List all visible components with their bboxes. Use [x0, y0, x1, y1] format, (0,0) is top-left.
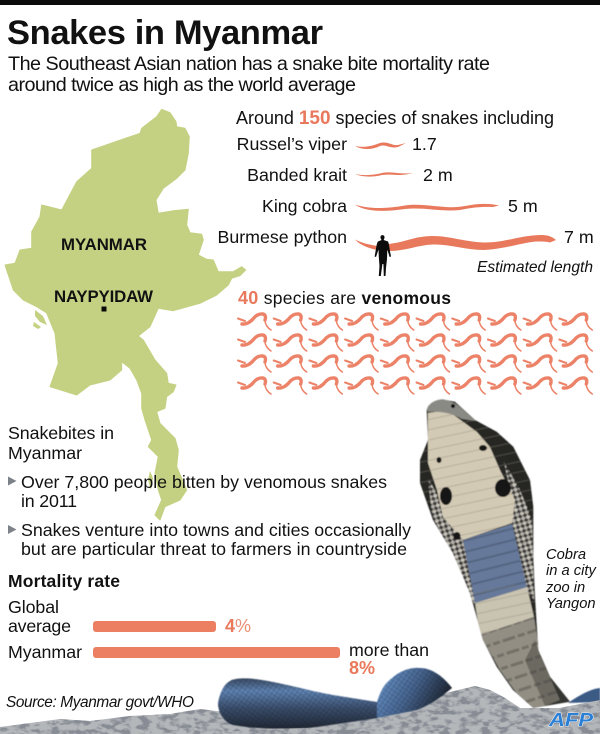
cobra caption: in a city [546, 563, 597, 579]
Russel's viper row [237, 134, 437, 154]
Burmese python row [218, 227, 594, 251]
global average bar [8, 597, 251, 636]
map labels [54, 235, 153, 312]
Myanmar bar: more than [349, 640, 429, 660]
bullet one: in 2011 [21, 491, 77, 511]
King cobra row: 5 m [508, 196, 538, 216]
cobra body [419, 398, 570, 708]
lower cream belly [475, 587, 534, 635]
photo: rocks in front of snake [218, 686, 600, 734]
bullet one [8, 472, 387, 511]
source: Source: Myanmar govt/WHO [6, 694, 194, 711]
cobra caption: Yangon [546, 596, 596, 612]
venomous heading: 40 species are venomous [238, 288, 451, 308]
cobra caption: Cobra [546, 547, 586, 563]
Banded krait row: 2 m [423, 165, 453, 185]
Myanmar bar: 8% [349, 658, 375, 678]
subtitle: around twice as high as the world average [8, 74, 356, 96]
hood markings [436, 445, 511, 540]
title: Snakes in Myanmar [7, 14, 323, 52]
global average bar: 4% [225, 616, 251, 636]
bullet one: Over 7,800 people bitten by venomous snakes [21, 472, 387, 492]
Myanmar bar: Myanmar [8, 642, 82, 662]
photo: blue snake coil [218, 668, 600, 729]
AFP logo: AFP [548, 710, 594, 730]
cobra caption: zoo in [545, 580, 585, 596]
top rule [0, 0, 600, 5]
mortality bar chart [8, 597, 429, 678]
photo: ground behind snake [0, 686, 600, 734]
map labels: MYANMAR [61, 235, 147, 254]
lower body [480, 617, 560, 712]
King cobra row: King cobra [262, 196, 347, 216]
snake length chart [218, 134, 594, 276]
scaled hood edges [428, 462, 534, 604]
snakebites text block [8, 423, 411, 559]
subtitle: The Southeast Asian nation has a snake bite mortality rate [8, 53, 490, 75]
species heading: Around 150 species of snakes including [236, 108, 554, 129]
snakebites text block: Snakebites in [8, 423, 114, 443]
Russel's viper row: Russel’s viper [237, 134, 347, 154]
snakebites text block: Myanmar [8, 443, 82, 463]
King cobra row [262, 196, 538, 216]
global average bar: average [8, 616, 71, 636]
mortality rate heading: Mortality rate [8, 571, 120, 591]
map labels: NAYPYIDAW [54, 287, 153, 306]
Burmese python row: 7 m [564, 227, 594, 247]
pictogram: 40 venomous snakes [238, 314, 592, 394]
Banded krait row: Banded krait [247, 165, 347, 185]
cobra caption [545, 547, 597, 612]
bullet two [8, 520, 411, 559]
caption: estimated length: Estimated length [477, 259, 593, 276]
cobra head [427, 399, 476, 421]
global average bar: Global [8, 597, 59, 617]
cream throat [428, 410, 515, 540]
bullet two: but are particular threat to farmers in countryside [21, 539, 407, 559]
blue belly band [463, 524, 527, 603]
Russel's viper row: 1.7 [412, 134, 437, 154]
bullet two: Snakes venture into towns and cities occasionally [21, 520, 411, 540]
subtitle [8, 53, 490, 96]
photo: cobra [419, 398, 570, 708]
icon: human silhouette [375, 235, 391, 276]
map of Myanmar [5, 109, 246, 520]
Myanmar bar [8, 640, 429, 678]
Banded krait row [247, 165, 453, 185]
Burmese python row: Burmese python [218, 227, 347, 247]
